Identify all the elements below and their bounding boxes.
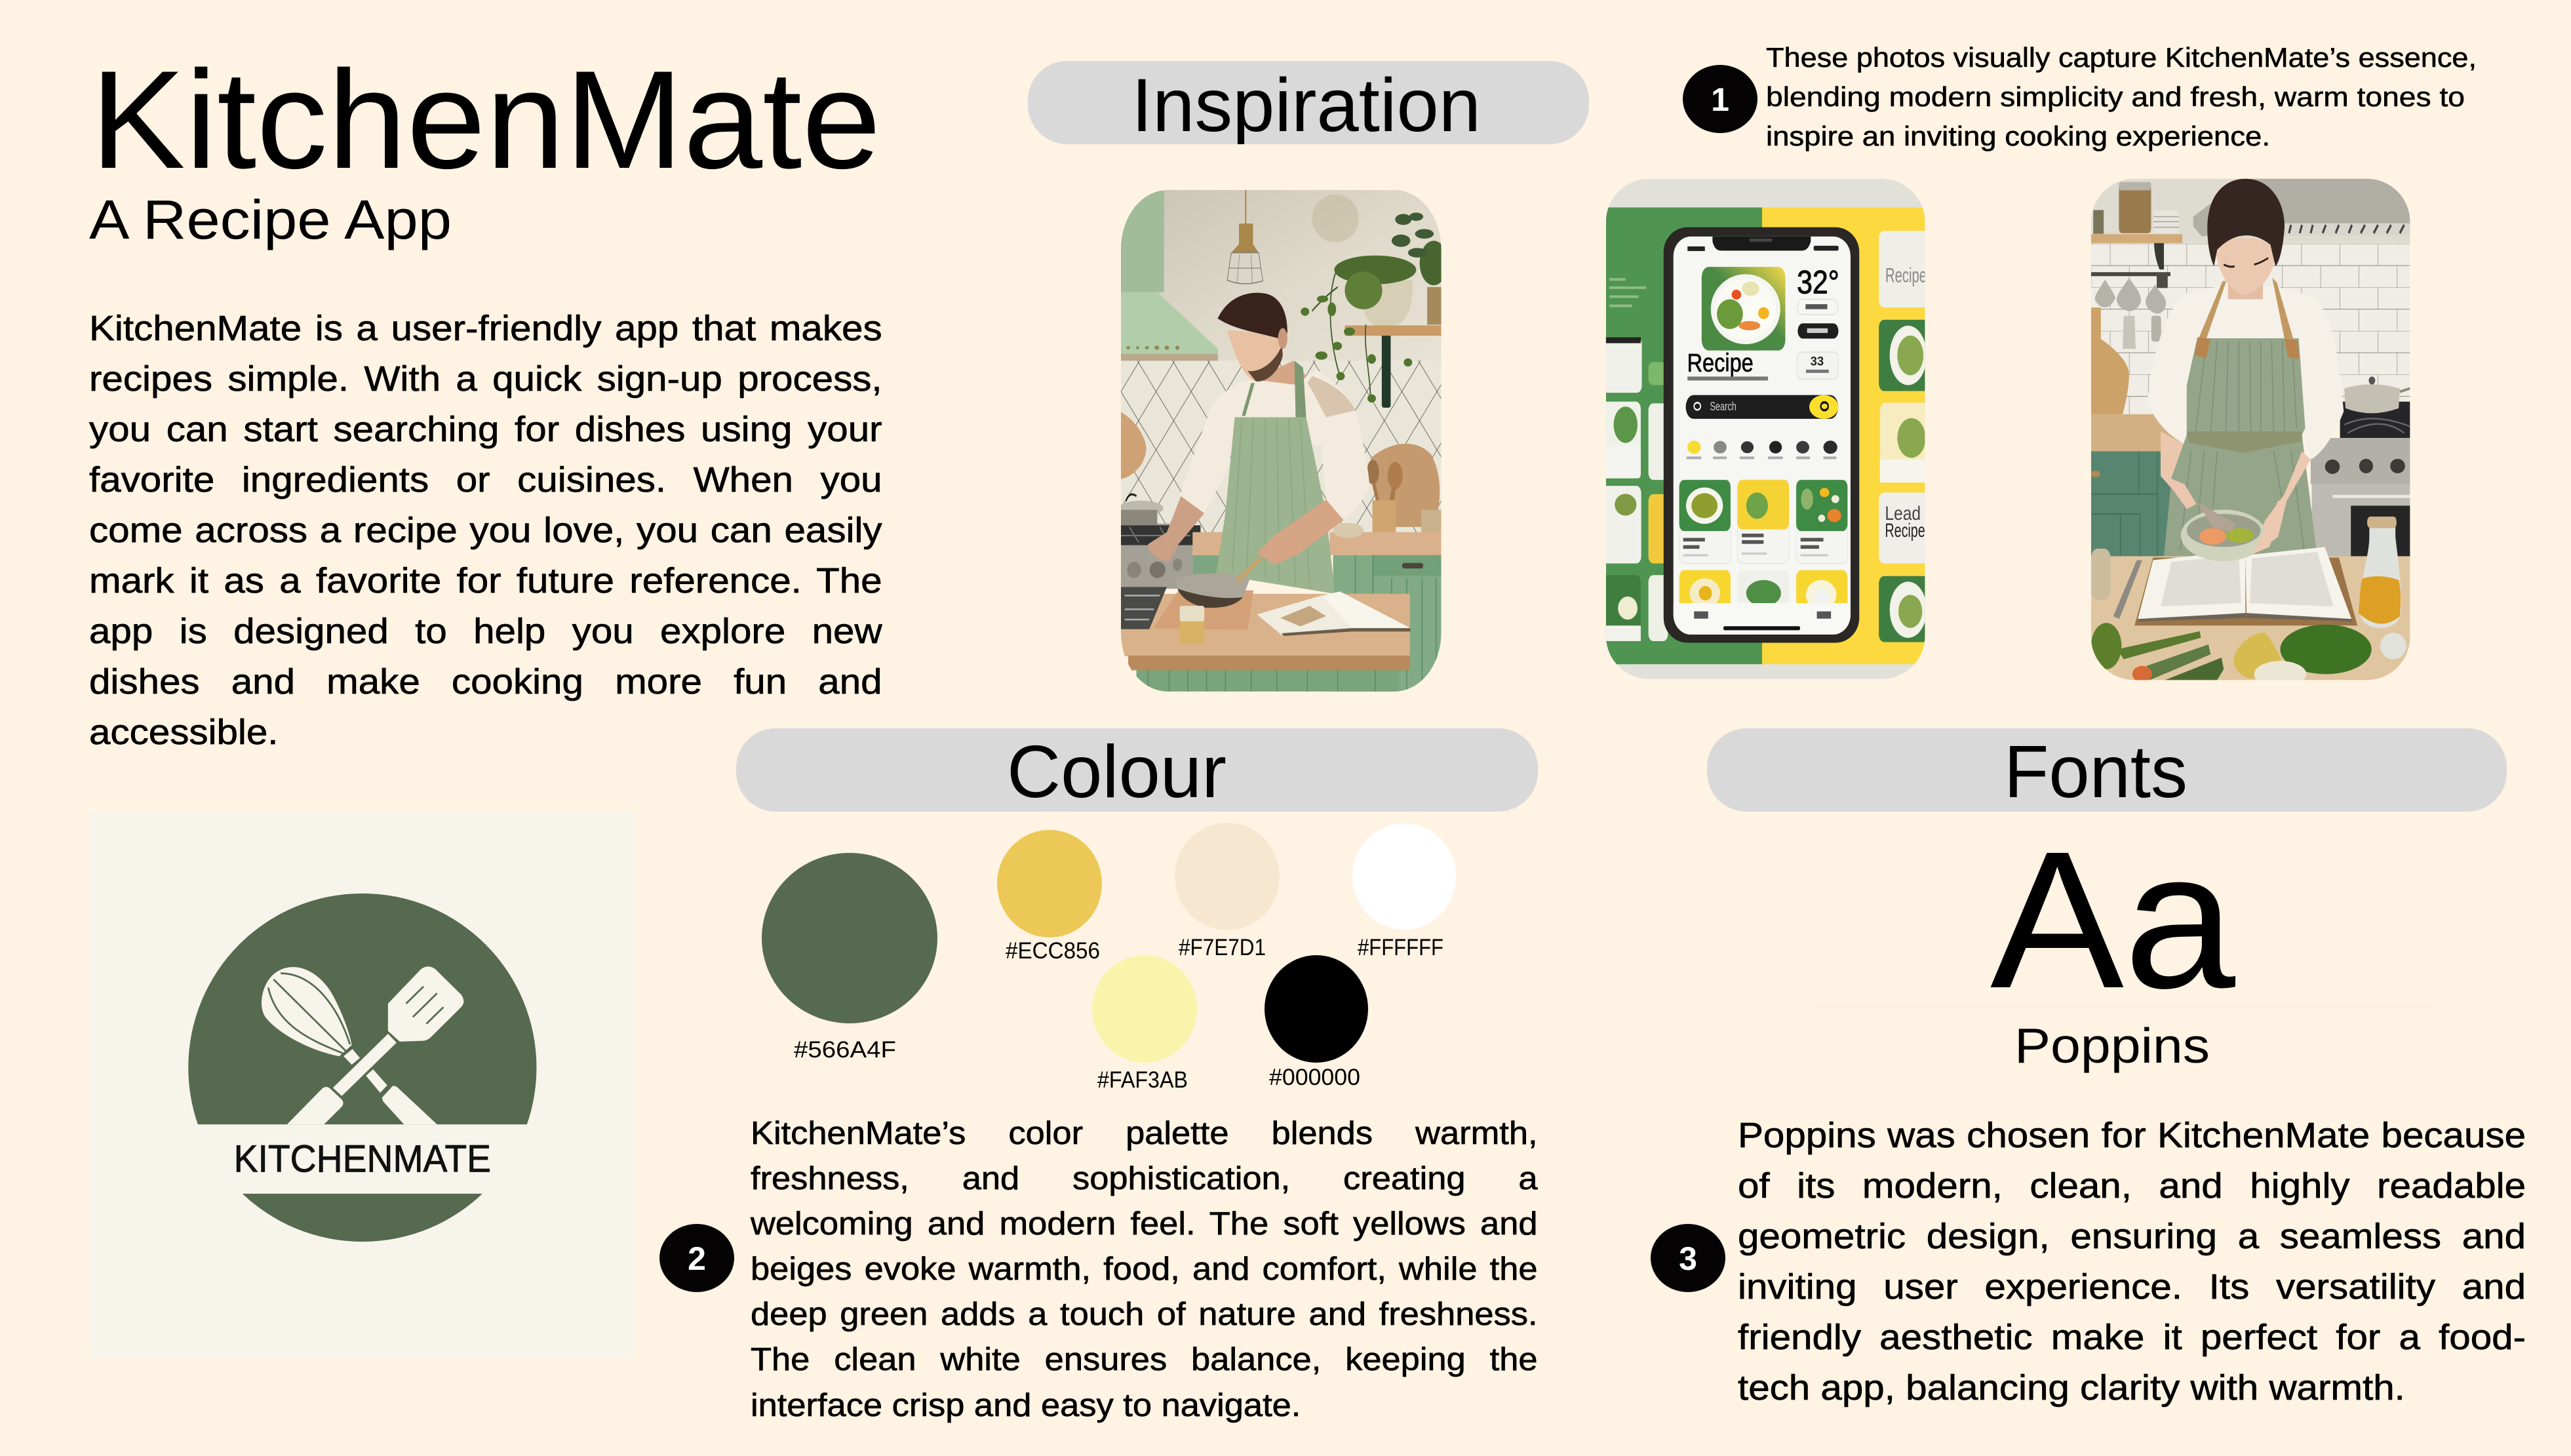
badge: number 3	[1651, 1224, 1725, 1292]
stove	[1119, 494, 1200, 589]
swatch #566A4F: #566A4F	[794, 1037, 896, 1063]
icon: whisk	[262, 967, 437, 1124]
text block: app description: mark it as a favorite for future reference. The	[89, 561, 882, 600]
swatch #FAF3AB: #FAF3AB	[1097, 1067, 1188, 1093]
category icons	[1687, 441, 1837, 458]
text block: inspiration note: inspire an inviting cooking experience.	[1766, 121, 2270, 151]
text block: font rationale: tech app, balancing clarity with warmth.	[1738, 1368, 2405, 1407]
side cards right: Recipe	[1885, 521, 1925, 541]
font specimen: Aa Poppins: Poppins	[2014, 1018, 2210, 1073]
text block: inspiration note: blending modern simplicity and fresh, warm tones to	[1766, 81, 2465, 112]
side cards right	[1879, 231, 1925, 642]
text block: colour rationale: welcoming and modern feel. The soft yellows and	[751, 1206, 1538, 1242]
photo: woman plating food over a recipe book	[2091, 178, 2410, 680]
app food card	[1702, 267, 1785, 351]
text block: colour rationale: beiges evoke warmth, food, and comfort, while the	[751, 1251, 1538, 1287]
smartphone	[1664, 227, 1859, 642]
badge: number 2: 2	[688, 1240, 706, 1277]
swatch #ECC856	[997, 830, 1102, 964]
side cards right: Lead	[1885, 503, 1921, 524]
shelf with jar and plates	[2091, 182, 2182, 269]
logo wordmark: KITCHENMATE	[234, 1137, 491, 1180]
text block: app description: come across a recipe you love, you can easily	[89, 511, 882, 550]
text block: font rationale: geometric design, ensuring a seamless and	[1738, 1217, 2526, 1256]
side cards left	[1606, 278, 1668, 641]
badge: number 1: 1	[1711, 81, 1729, 118]
photo: man cooking in green kitchen	[1121, 190, 1442, 692]
font specimen: Aa Poppins	[1815, 833, 2438, 1073]
icon: spatula	[287, 966, 463, 1124]
stove and oven	[2311, 376, 2410, 557]
text block: app description: favorite ingredients or cuisines. When you	[89, 460, 882, 500]
text block: font rationale	[1738, 1116, 2526, 1407]
swatch #F7E7D1: #F7E7D1	[1179, 935, 1266, 960]
swatch #000000	[1265, 955, 1368, 1090]
text block: app description: dishes and make cooking more fun and	[89, 662, 882, 701]
text block: font rationale: of its modern, clean, and highly readable	[1738, 1166, 2526, 1206]
text block: colour rationale: KitchenMate’s color palette blends warmth,	[751, 1116, 1538, 1151]
search bar	[1686, 395, 1838, 419]
side cards right: Recipe	[1885, 264, 1927, 286]
text block: colour rationale: The clean white ensures balance, keeping the	[751, 1342, 1538, 1377]
heading: app title and subtitle: KitchenMate	[90, 42, 881, 198]
text block: app description: app is designed to help you explore new	[89, 612, 882, 651]
swatch #566A4F	[762, 853, 937, 1063]
swatch #FFFFFF: #FFFFFF	[1358, 935, 1443, 960]
badge: number 2	[659, 1224, 734, 1292]
text block: font rationale: friendly aesthetic make it perfect for a food-	[1738, 1318, 2526, 1357]
text block: inspiration note	[1766, 42, 2477, 151]
badge: number 1	[1683, 65, 1757, 133]
range hood	[1121, 191, 1218, 361]
swatch #FAF3AB	[1092, 955, 1197, 1093]
text block: app description: you can start searching for dishes using your	[89, 410, 882, 449]
text block: font rationale: Poppins was chosen for KitchenMate because	[1738, 1116, 2526, 1155]
smartphone: Recipe	[1687, 349, 1754, 378]
heading pill: Colour: Colour	[1007, 730, 1227, 812]
swatch #FFFFFF	[1352, 823, 1456, 960]
logo panel: KitchenMate whisk and spatula	[89, 813, 635, 1357]
text block: colour rationale: freshness, and sophistication, creating a	[751, 1161, 1538, 1196]
island counter with pan, jar and book	[1121, 556, 1410, 692]
temperature and chips: 32°	[1797, 264, 1839, 301]
badge: number 3: 3	[1679, 1240, 1697, 1277]
man in apron	[1148, 293, 1369, 594]
text block: colour rationale: interface crisp and easy to navigate.	[751, 1388, 1301, 1423]
heading: app title and subtitle: A Recipe App	[89, 189, 452, 250]
swatch #000000: #000000	[1269, 1065, 1360, 1090]
hanging ladles	[2091, 272, 2170, 349]
heading pill: Fonts	[1707, 728, 2507, 812]
text block: inspiration note: These photos visually capture KitchenMate’s essence,	[1766, 42, 2477, 73]
work counter with book, bowl, bottle and vegetables	[2091, 475, 2410, 687]
heading pill: Colour	[736, 728, 1538, 812]
shelf with plants	[1301, 195, 1448, 408]
text block: app description	[89, 309, 882, 752]
text block: font rationale: inviting user experience. Its versatility and	[1738, 1267, 2526, 1307]
colour palette swatches	[762, 823, 1456, 1093]
swatch #F7E7D1	[1175, 823, 1280, 960]
text block: app description: recipes simple. With a quick sign-up process,	[89, 359, 882, 399]
smartphone: 33	[1811, 355, 1824, 368]
extractor hood	[2193, 179, 2410, 237]
heading pill: Fonts: Fonts	[2004, 730, 2188, 812]
wooden boards and utensils	[1121, 412, 1442, 538]
text block: colour rationale	[750, 1116, 1538, 1423]
pendant lamp	[1227, 190, 1263, 284]
text block: colour rationale: deep green adds a touch of nature and freshness.	[751, 1297, 1538, 1332]
woman in apron	[2148, 179, 2344, 557]
photo: phone app mockup on green and yellow background	[1606, 178, 1925, 679]
text block: app description: accessible.	[89, 713, 279, 752]
search bar: Search	[1710, 400, 1737, 414]
cutting board and back counter	[2091, 307, 2188, 556]
back counter and cabinets	[1192, 523, 1442, 692]
swatch #ECC856: #ECC856	[1006, 938, 1100, 964]
heading pill: Inspiration	[1028, 61, 1589, 144]
text block: app description: KitchenMate is a user-friendly app that makes	[89, 309, 882, 348]
recipe cards grid	[1674, 480, 1851, 636]
